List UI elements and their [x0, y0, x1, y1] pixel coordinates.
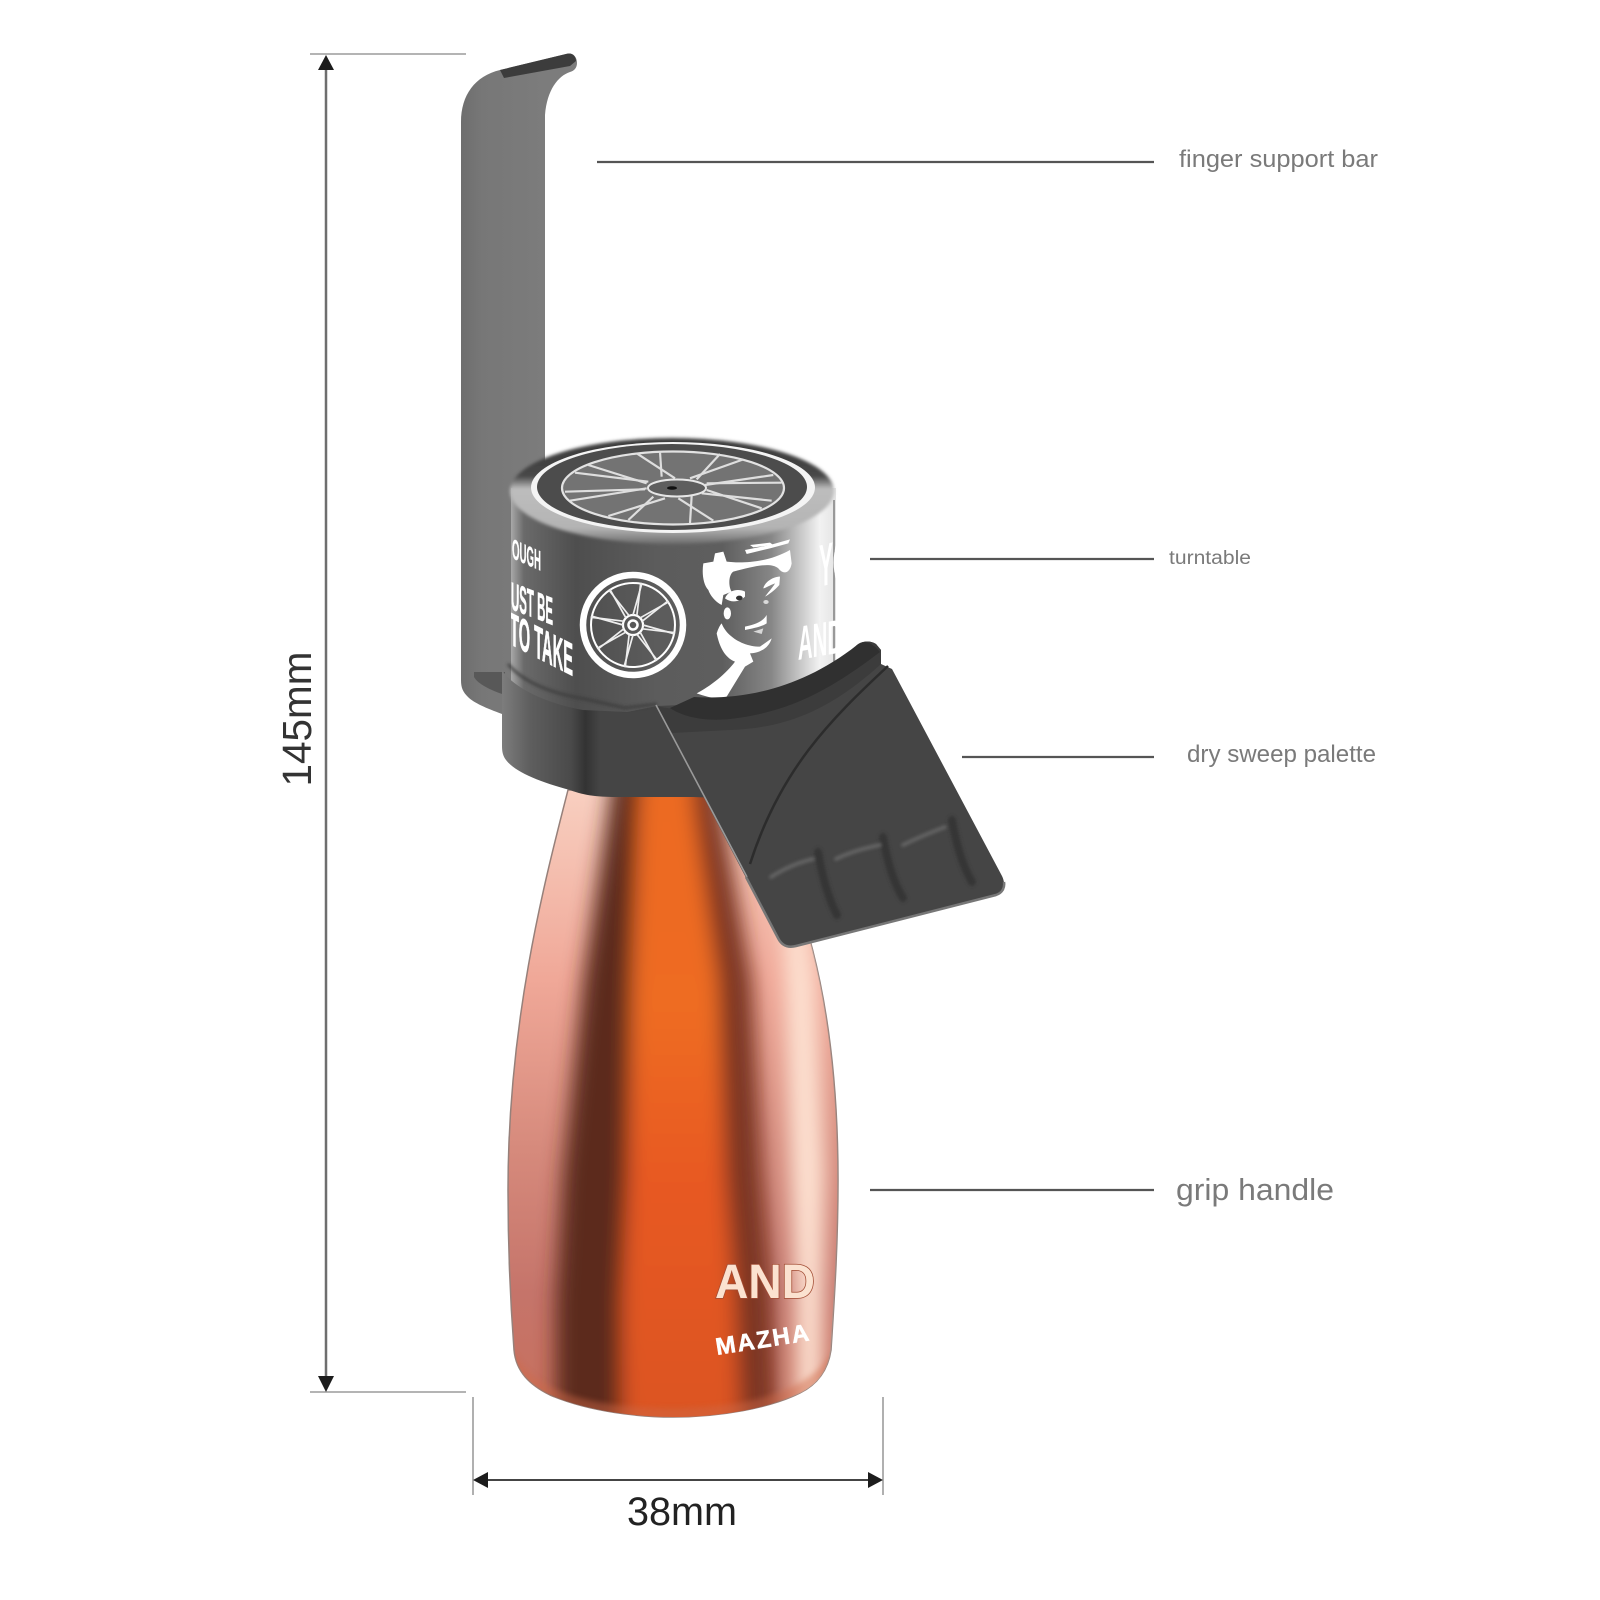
product diagram: YO — [819, 525, 849, 600]
palette hinge edge — [656, 705, 747, 877]
turntable side text left — [511, 540, 573, 676]
turntable side text left: OUGH — [512, 533, 541, 578]
turntable: UST BE — [511, 573, 553, 634]
product diagram — [282, 53, 1378, 1526]
bottle base rim — [515, 1354, 830, 1417]
palette seam — [750, 666, 888, 864]
dry sweep palette — [656, 641, 1004, 948]
turntable side portrait — [697, 539, 792, 698]
bottle brand AND: AND — [715, 1256, 815, 1309]
turntable side text right — [798, 542, 836, 660]
bottle brand MAZHA: MAZHA — [714, 1320, 811, 1361]
collar base — [502, 645, 880, 800]
grip handle bottle — [507, 789, 839, 1418]
callout: finger support bar: finger support bar — [1179, 146, 1378, 173]
product diagram: AND — [798, 610, 842, 671]
turntable — [510, 438, 849, 725]
callout: grip handle: grip handle — [1176, 1172, 1334, 1207]
turntable side wheel icon — [583, 575, 683, 675]
finger support bar — [461, 53, 577, 714]
callout: turntable: turntable — [1169, 548, 1251, 569]
dimension: height 145mm: 145mm — [274, 652, 320, 786]
callout: dry sweep palette: dry sweep palette — [1187, 741, 1376, 768]
palette grooves — [771, 820, 972, 915]
dimension: width 38mm: 38mm — [627, 1490, 737, 1534]
dimension: height 145mm — [274, 54, 466, 1392]
bottle reflection bands — [556, 760, 826, 1470]
turntable: TO TAKE — [510, 604, 573, 686]
dimension: width 38mm — [473, 1397, 883, 1534]
turntable top wheel — [531, 442, 815, 533]
